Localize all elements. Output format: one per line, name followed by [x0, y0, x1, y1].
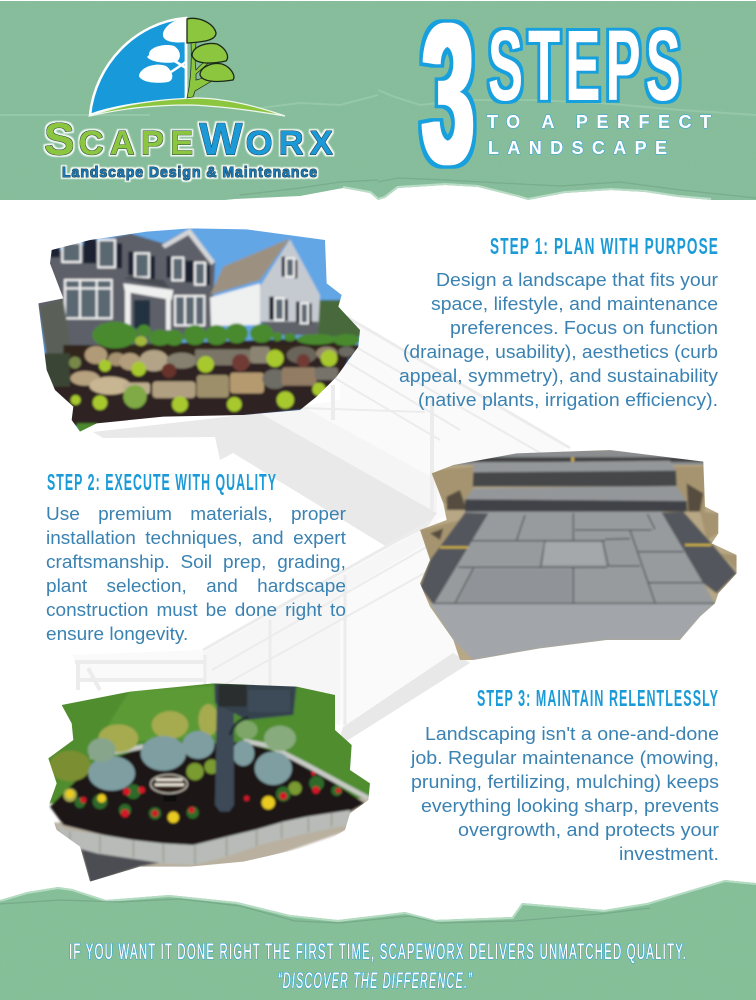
photo: house with terraced boulder landscaping [38, 228, 360, 432]
step 3 body text: overgrowth, and protects your [458, 820, 719, 840]
text: “DISCOVER THE DIFFERENCE.” [278, 968, 473, 993]
step 3 body text: job. Regular maintenance (mowing, [410, 748, 719, 768]
subtitle line 1: TO A PERFECT [487, 112, 711, 132]
step 2 body text: Use premium materials, proper [46, 504, 346, 524]
step 1 body text: space, lifestyle, and maintenance [431, 294, 718, 314]
logo: ScapeWorx [44, 18, 339, 181]
step 1 body text: appeal, symmetry), and sustainability [399, 366, 718, 386]
bottom torn green paper band [0, 878, 756, 1000]
step 2 body text: ensure longevity. [46, 624, 188, 644]
top torn green paper band [0, 1, 756, 201]
step 2 heading: STEP 2: EXECUTE WITH QUALITY [47, 469, 277, 495]
photo: mulched garden bed with mailbox [48, 683, 370, 882]
step 1 body text [399, 270, 718, 410]
step 1 body text: (drainage, usability), aesthetics (curb [403, 342, 718, 362]
step 1 body text: (native plants, irrigation efficiency). [418, 390, 718, 410]
logo tagline: Landscape Design & Maintenance [62, 165, 318, 181]
step 2 body text [46, 504, 346, 644]
photo: stone steps and paver walkway [420, 450, 737, 660]
logo wordmark: SCAPEWORX [44, 114, 339, 164]
step 3 body text: pruning, fertilizing, mulching) keeps [411, 772, 719, 792]
step 2 body text: installation techniques, and expert [46, 528, 346, 548]
step 1 body text: Design a landscape that fits your [436, 270, 718, 290]
step 3 body text: investment. [619, 844, 719, 864]
step 3 body text: everything looking sharp, prevents [421, 796, 719, 816]
step 3 body text [410, 724, 719, 864]
subtitle line 2: LANDSCAPE [488, 138, 667, 158]
logo icon: dome and tree [90, 18, 285, 116]
background: faint ramp and railing graphic [73, 313, 570, 747]
step 2 body text: plant selection, and hardscape [46, 576, 346, 596]
step 1 body text: preferences. Focus on function [450, 318, 718, 338]
step 2 body text: construction must be done right to [46, 600, 346, 620]
step 3 body text: Landscaping isn't a one-and-done [425, 724, 719, 744]
step 2 body text: craftsmanship. Soil prep, grading, [46, 552, 346, 572]
title: 3 Steps to a Perfect Landscape [422, 0, 711, 204]
